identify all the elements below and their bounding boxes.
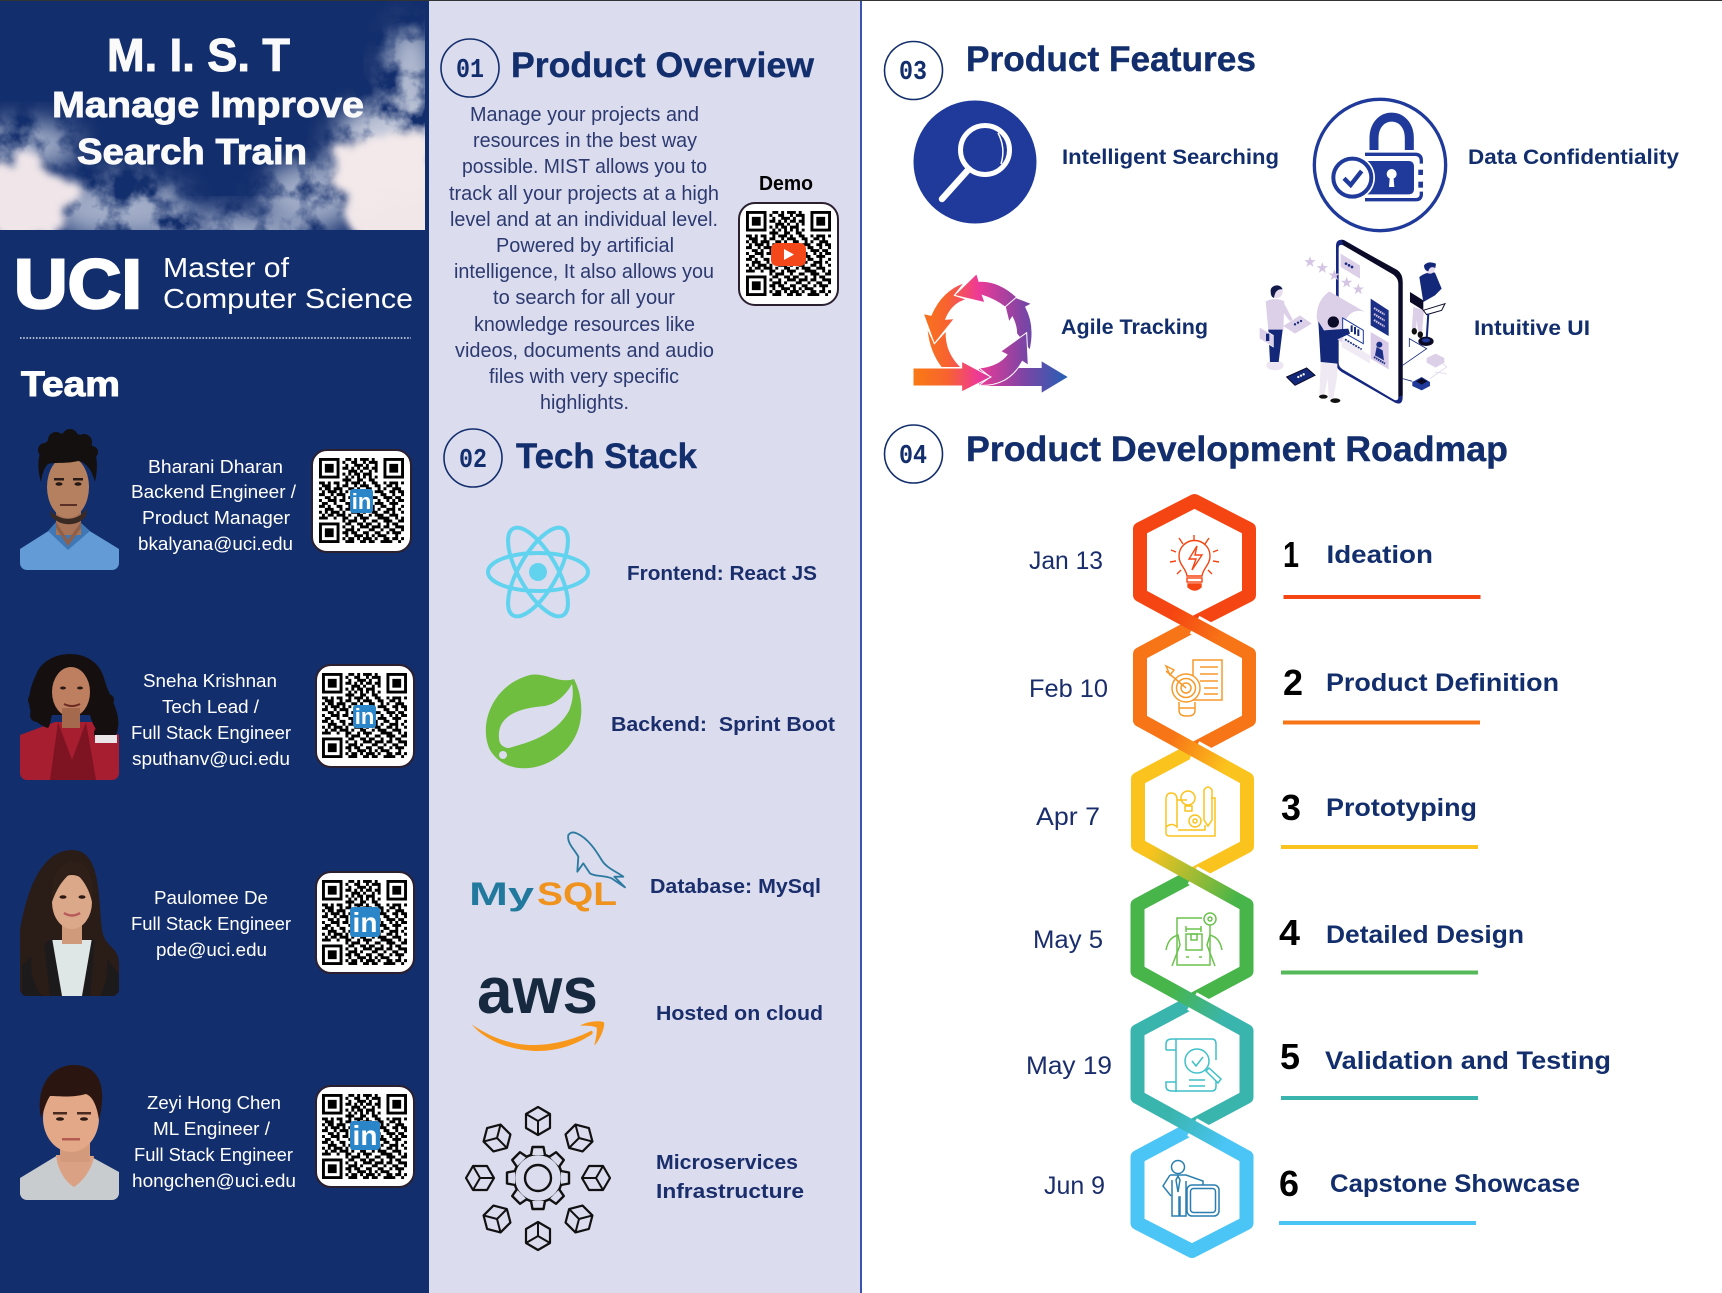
dates: Feb 10 xyxy=(1029,675,1108,703)
text: product overview paragraph: intelligence, It also allows you xyxy=(454,261,714,283)
logo: UCI Master of Computer Science: UCI xyxy=(14,245,142,323)
icon: magnifying glass xyxy=(914,100,1036,224)
text: Paulomee details: Full Stack Engineer xyxy=(131,913,291,934)
heading: 04 Product Development Roadmap: Product Development Roadmap xyxy=(966,430,1508,469)
text: Bharani details: Product Manager xyxy=(142,507,290,528)
step 6: Capstone Showcase: 6 xyxy=(1279,1163,1299,1204)
team member: Paulomee De xyxy=(20,850,414,996)
QR code: demo video xyxy=(739,203,838,305)
step 4: Detailed Design: Detailed Design xyxy=(1326,921,1524,949)
QR code: Sneha LinkedIn: in xyxy=(355,704,374,729)
logo: UCI Master of Computer Science xyxy=(14,245,413,323)
logo: UCI Master of Computer Science: Computer Science xyxy=(163,283,413,314)
panel: team sidebar xyxy=(0,0,460,1293)
chain: hexagon ribbon xyxy=(1138,501,1249,1251)
QR code: Bharani LinkedIn xyxy=(312,450,411,552)
logo: MySQL: SQL xyxy=(537,876,617,912)
step 2: Product Definition xyxy=(1283,662,1559,724)
text: Bharani details: Backend Engineer / xyxy=(131,481,297,502)
text: Sneha details: Sneha Krishnan xyxy=(143,670,277,691)
label: Frontend: Frontend: React JS xyxy=(627,563,817,585)
step 1: Ideation xyxy=(1283,534,1480,599)
QR code: Zeyi LinkedIn xyxy=(316,1086,414,1187)
dates: May 5 xyxy=(1033,926,1103,954)
photo: Paulomee xyxy=(20,850,119,996)
panel: product features xyxy=(884,40,1679,404)
photo: Bharani xyxy=(20,429,119,570)
QR code: Paulomee LinkedIn xyxy=(316,872,414,973)
logo: AWS: aws xyxy=(477,953,598,1027)
illustration: intuitive UI phone and people xyxy=(1259,239,1447,404)
team member: Zeyi Hong Chen xyxy=(20,1065,414,1200)
step 5: Validation and Testing: Validation and Testing xyxy=(1325,1047,1611,1075)
text: Zeyi details: Full Stack Engineer xyxy=(134,1144,293,1165)
step 3: Prototyping xyxy=(1281,787,1478,849)
text: Zeyi details xyxy=(132,1092,296,1191)
hexagon 1 xyxy=(1140,501,1249,654)
heading: 04 Product Development Roadmap: 04 xyxy=(899,442,927,472)
step 5: Validation and Testing xyxy=(1280,1036,1611,1100)
dates xyxy=(1026,547,1112,1200)
text: Zeyi details: hongchen@uci.edu xyxy=(132,1170,296,1191)
text: product overview paragraph: resources in the best way xyxy=(473,130,697,152)
icon: blueprint prototype xyxy=(1166,787,1215,836)
text: product overview paragraph: videos, documents and audio xyxy=(455,340,714,362)
hexagon 6 xyxy=(1138,1128,1246,1251)
icon: lock with check xyxy=(1314,99,1446,231)
icon: lightbulb idea xyxy=(1170,535,1219,590)
heading: 03 Product Features xyxy=(884,40,1256,100)
text: product overview paragraph: Powered by artificial xyxy=(496,235,674,257)
heading: 02 Tech Stack: 02 xyxy=(459,446,487,476)
step 1: Ideation: Ideation xyxy=(1326,541,1433,569)
step 2: Product Definition: Product Definition xyxy=(1326,669,1559,697)
text: Sneha details xyxy=(131,670,291,769)
title xyxy=(52,29,364,172)
text: Bharani details: Bharani Dharan xyxy=(148,456,283,477)
text: Paulomee details xyxy=(131,887,291,960)
heading: 03 Product Features: Product Features xyxy=(966,40,1256,79)
team member: Bharani Dharan xyxy=(20,429,411,570)
step 3: Prototyping: 3 xyxy=(1281,787,1301,828)
icon: tablet detailed design xyxy=(1166,913,1222,966)
heading: 03 Product Features: 03 xyxy=(899,58,927,88)
logo: UCI Master of Computer Science: Master of xyxy=(163,252,289,283)
heading: 04 Product Development Roadmap xyxy=(884,425,1508,483)
QR code: Zeyi LinkedIn: in xyxy=(353,1120,377,1151)
text: Bharani details: bkalyana@uci.edu xyxy=(138,533,293,554)
logo: MySQL: My xyxy=(469,876,534,912)
hexagon 2 xyxy=(1140,625,1249,779)
text: product overview paragraph: highlights. xyxy=(540,392,629,414)
step 4: Detailed Design: 4 xyxy=(1279,912,1300,953)
text: product overview paragraph: Manage your projects and xyxy=(470,104,699,126)
heading: Team: Team xyxy=(21,365,120,404)
dates: May 19 xyxy=(1026,1052,1112,1080)
label: Backend: Backend: Sprint Boot xyxy=(611,714,835,736)
step 2: Product Definition: 2 xyxy=(1283,662,1303,703)
label: Hosted on cloud: Hosted on cloud xyxy=(656,1003,823,1025)
icon: target and document xyxy=(1166,660,1222,716)
step 5: Validation and Testing: 5 xyxy=(1280,1036,1300,1077)
dates: Apr 7 xyxy=(1036,803,1100,831)
QR code: Sneha LinkedIn xyxy=(316,665,414,767)
text: Paulomee details: pde@uci.edu xyxy=(156,939,267,960)
logo: MySQL xyxy=(469,832,625,912)
text: Paulomee details: Paulomee De xyxy=(154,887,268,908)
dates: Jan 13 xyxy=(1029,547,1103,575)
step 3: Prototyping: Prototyping xyxy=(1326,794,1477,822)
label: Data Confidentiality: Data Confidentiality xyxy=(1468,146,1679,169)
team member: Sneha Krishnan xyxy=(20,654,414,780)
hexagon 3 xyxy=(1138,750,1247,905)
title: Search Train xyxy=(77,131,307,172)
heading: 01 Product Overview xyxy=(441,39,815,97)
text: Zeyi details: Zeyi Hong Chen xyxy=(147,1092,281,1113)
label: Demo: Demo xyxy=(759,173,813,195)
QR code: Paulomee LinkedIn: in xyxy=(353,907,377,938)
heading: 02 Tech Stack xyxy=(444,429,698,487)
label: Database: Database: MySql xyxy=(650,876,821,898)
icon: microservices gear and cubes xyxy=(466,1107,610,1250)
text: Sneha details: Tech Lead / xyxy=(162,696,260,717)
icon: Spring leaf xyxy=(486,675,581,768)
label: Microservices Infrastructure: Infrastructure xyxy=(656,1181,804,1203)
photo: Zeyi xyxy=(20,1065,119,1200)
icon: agile loop arrows xyxy=(913,274,1068,393)
step 4: Detailed Design xyxy=(1279,912,1524,974)
text: product overview paragraph: files with very specific xyxy=(489,366,679,388)
step 1: Ideation: 1 xyxy=(1283,534,1299,575)
label: Intelligent Searching: Intelligent Searching xyxy=(1062,146,1279,169)
icon: React xyxy=(488,519,588,625)
QR code: Bharani LinkedIn: in xyxy=(352,489,371,514)
text: product overview paragraph: possible. MIST allows you to xyxy=(462,156,707,178)
icon: scroll validation xyxy=(1166,1039,1221,1092)
label: Microservices Infrastructure: Microservices xyxy=(656,1152,798,1174)
heading: 02 Tech Stack: Tech Stack xyxy=(516,437,698,476)
sky banner xyxy=(0,11,425,230)
text: product overview paragraph: knowledge resources like xyxy=(474,314,695,336)
panel: overview and tech stack xyxy=(429,0,862,1293)
title: M. I. S. T xyxy=(107,29,290,81)
label: Intuitive UI: Intuitive UI xyxy=(1474,317,1590,340)
hexagon 4 xyxy=(1138,876,1246,1031)
text: Zeyi details: ML Engineer / xyxy=(153,1118,271,1139)
heading: 01 Product Overview: 01 xyxy=(456,56,484,86)
step 6: Capstone Showcase xyxy=(1279,1163,1580,1225)
text: Sneha details: sputhanv@uci.edu xyxy=(132,748,290,769)
label: Microservices Infrastructure xyxy=(656,1152,804,1203)
dates: Jun 9 xyxy=(1044,1172,1105,1200)
text: product overview paragraph xyxy=(449,104,719,414)
text: product overview paragraph: track all your projects at a high xyxy=(449,183,719,205)
heading: 01 Product Overview: Product Overview xyxy=(511,46,815,85)
icon: person with board xyxy=(1163,1160,1219,1216)
text: product overview paragraph: level and at an individual level. xyxy=(450,209,718,231)
text: Sneha details: Full Stack Engineer xyxy=(131,722,291,743)
hexagon 5 xyxy=(1138,1002,1246,1157)
step 6: Capstone Showcase: Capstone Showcase xyxy=(1330,1170,1580,1198)
label: Agile Tracking: Agile Tracking xyxy=(1061,316,1208,339)
text: product overview paragraph: to search for all your xyxy=(493,287,675,309)
title: Manage Improve xyxy=(52,84,364,125)
photo: Sneha xyxy=(20,654,119,780)
panel: product development roadmap xyxy=(884,425,1611,1251)
text: Bharani details xyxy=(131,456,297,554)
